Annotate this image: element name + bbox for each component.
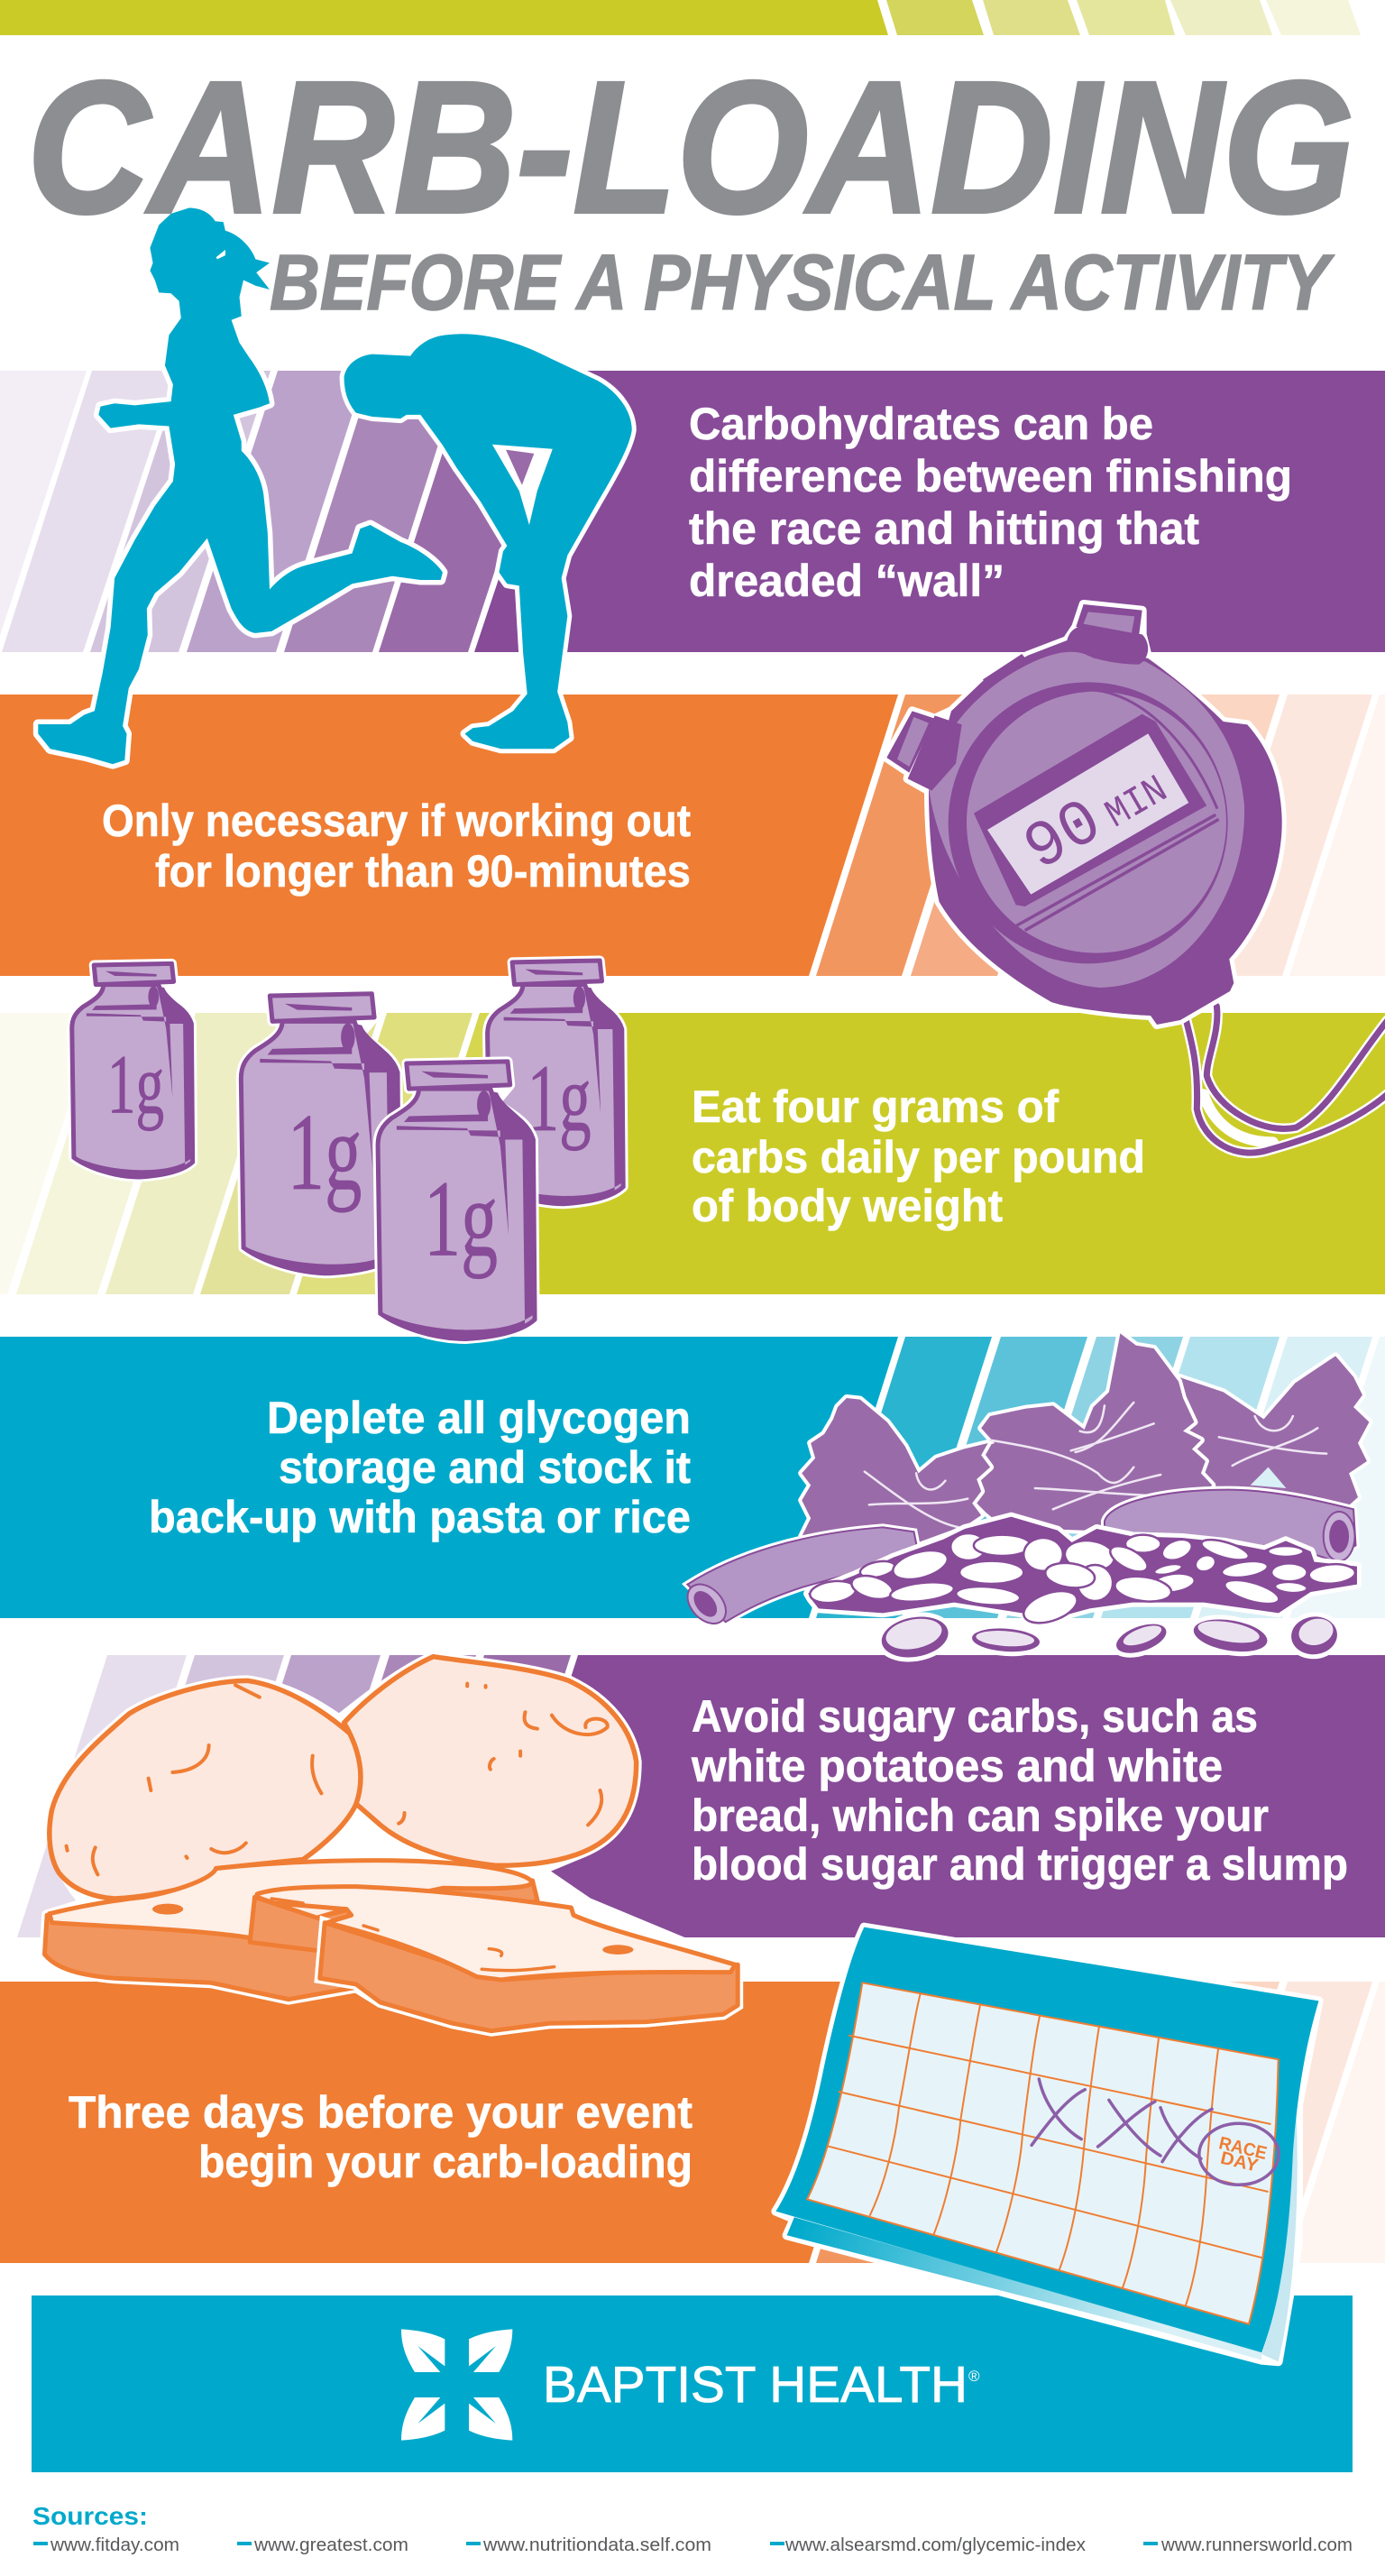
calendar sheet xyxy=(775,1927,1319,2352)
panel: orange band, 90 minutes xyxy=(0,695,1385,976)
text: sugary carbs: blood sugar and trigger a slump xyxy=(692,1839,1348,1890)
text: four grams: carbs daily per pound xyxy=(692,1132,1145,1182)
text: four grams: Eat four grams of xyxy=(692,1081,1059,1132)
stopwatch buttons xyxy=(886,604,1148,791)
pasta fold lines xyxy=(865,1403,1326,1527)
race day circle xyxy=(1199,2123,1279,2185)
icon: potatoes and bread xyxy=(44,1657,738,2031)
icon: calendar xyxy=(775,1927,1319,2361)
source list: www.runnersworld.com xyxy=(1160,2535,1353,2555)
logo wordmark: BAPTIST HEALTH xyxy=(543,2356,968,2414)
icon: stopwatch lanyard xyxy=(1185,1006,1385,1153)
text: sugary carbs: white potatoes and white xyxy=(691,1741,1223,1791)
stopwatch display xyxy=(974,714,1219,931)
text: sugary carbs: bread, which can spike your xyxy=(692,1790,1269,1841)
icon: small bottle: 1g xyxy=(107,1037,164,1131)
text: 90 minutes xyxy=(102,796,691,897)
panel: orange band, three days xyxy=(0,1982,1385,2263)
bread: front slice xyxy=(250,1887,738,2031)
source list: www.alsearsmd.com/glycemic-index xyxy=(784,2535,1086,2555)
source list xyxy=(33,2535,1353,2555)
text: three days xyxy=(69,2087,692,2187)
icon: large middle bottle: 1g xyxy=(288,1091,362,1213)
stopwatch reading: 90: 90 xyxy=(1013,786,1114,888)
calendar grid xyxy=(807,1983,1279,2324)
icon: front bottle: 1g xyxy=(424,1157,498,1279)
panel: purple band, sugary carbs xyxy=(17,1655,1385,1937)
icon: small bottle xyxy=(72,963,194,1178)
text: sugary carbs xyxy=(691,1691,1348,1890)
calendar white outline xyxy=(775,1927,1319,2361)
panel: purple band, carbohydrates xyxy=(0,371,1385,652)
bread: back slice xyxy=(44,1861,537,2000)
source list: www.nutritiondata.self.com xyxy=(482,2535,711,2555)
potato: right xyxy=(344,1657,637,1865)
stopwatch white outline xyxy=(886,604,1282,1025)
white outline xyxy=(44,1657,738,2031)
text: carbohydrates: dreaded “wall” xyxy=(689,556,1004,606)
icon: rice pile xyxy=(808,1517,1357,1663)
text: carbohydrates xyxy=(689,399,1292,606)
text: carbohydrates: Carbohydrates can be xyxy=(689,399,1153,449)
text: four grams xyxy=(692,1081,1145,1231)
potato marks xyxy=(67,1684,608,1874)
top stripe bar xyxy=(0,0,1361,35)
text: glycogen: Deplete all glycogen xyxy=(267,1393,691,1443)
text: four grams: of body weight xyxy=(692,1181,1003,1231)
text: glycogen: back-up with pasta or rice xyxy=(149,1492,691,1542)
text: glycogen xyxy=(149,1393,691,1542)
text: 90 minutes: Only necessary if working out xyxy=(102,796,691,846)
source list: www.fitday.com xyxy=(50,2535,179,2555)
registered mark: ® xyxy=(968,2368,980,2385)
macaroni tubes xyxy=(1105,1490,1356,1560)
footer panel: Baptist Health xyxy=(32,2295,1353,2472)
loose rice grains xyxy=(876,1610,1345,1663)
icon: front bottle xyxy=(378,1062,537,1340)
text: carbohydrates: the race and hitting that xyxy=(689,503,1199,554)
potato: left xyxy=(50,1680,361,1899)
icon: back bottle xyxy=(488,961,625,1205)
race day label: RACE xyxy=(1217,2133,1269,2164)
text: three days: Three days before your event xyxy=(69,2087,692,2138)
panel: olive band, four grams xyxy=(0,1013,1385,1294)
text: carbohydrates: difference between finishing xyxy=(689,451,1292,501)
race day label: DAY xyxy=(1218,2148,1261,2176)
text: sugary carbs: Avoid sugary carbs, such as xyxy=(692,1691,1258,1742)
panel: teal band, glycogen xyxy=(0,1337,1385,1618)
farfalle pasta xyxy=(802,1333,1369,1542)
icon: back bottle: 1g xyxy=(527,1045,592,1152)
text: 90 minutes: for longer than 90-minutes xyxy=(155,846,691,897)
text: glycogen: storage and stock it xyxy=(279,1442,691,1493)
source list: www.greatest.com xyxy=(253,2535,408,2555)
stopwatch case xyxy=(929,640,1282,1025)
icon: pasta xyxy=(680,1333,1369,1627)
icon: large middle bottle xyxy=(241,994,400,1274)
icon: runner silhouette xyxy=(38,208,443,764)
stopwatch reading: MIN: MIN xyxy=(1098,768,1176,839)
race day label xyxy=(1217,2133,1269,2176)
icon: stopwatch xyxy=(886,604,1282,1025)
calendar back pages xyxy=(787,2081,1298,2361)
stopwatch bezel xyxy=(929,652,1244,988)
footnote heading: sources: Sources: xyxy=(32,2502,148,2530)
text: three days: begin your carb-loading xyxy=(198,2137,692,2187)
calendar X marks xyxy=(1032,2079,1212,2162)
icon: Baptist Health leaves xyxy=(401,2329,512,2441)
icon: exhausted man silhouette xyxy=(344,334,632,749)
